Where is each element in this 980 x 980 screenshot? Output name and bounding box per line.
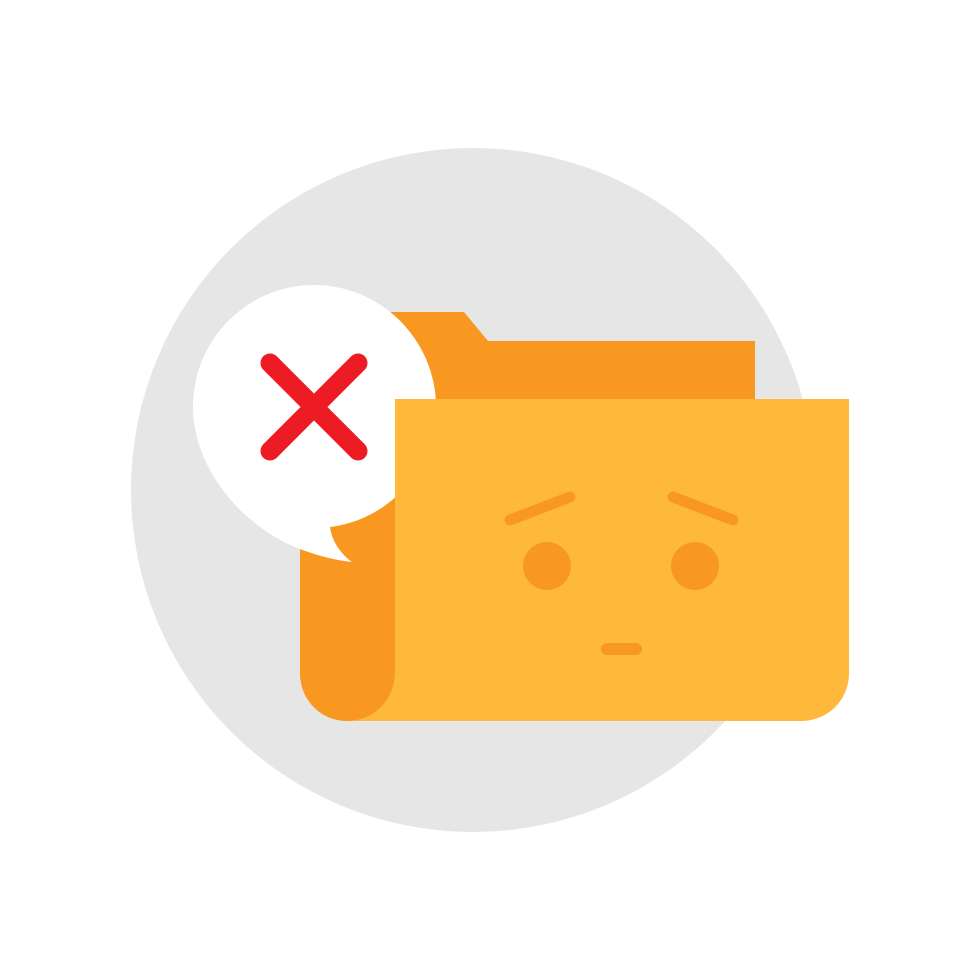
folder front [347, 399, 849, 721]
left eye [523, 542, 571, 590]
right eye [671, 542, 719, 590]
folder back with tab [300, 312, 755, 721]
background circle [131, 148, 815, 832]
mouth [607, 643, 636, 655]
speech bubble [193, 285, 436, 562]
icon: red cross [270, 363, 358, 451]
right eyebrow [673, 497, 733, 520]
face: sad expression [510, 497, 733, 649]
left eyebrow [510, 497, 570, 520]
